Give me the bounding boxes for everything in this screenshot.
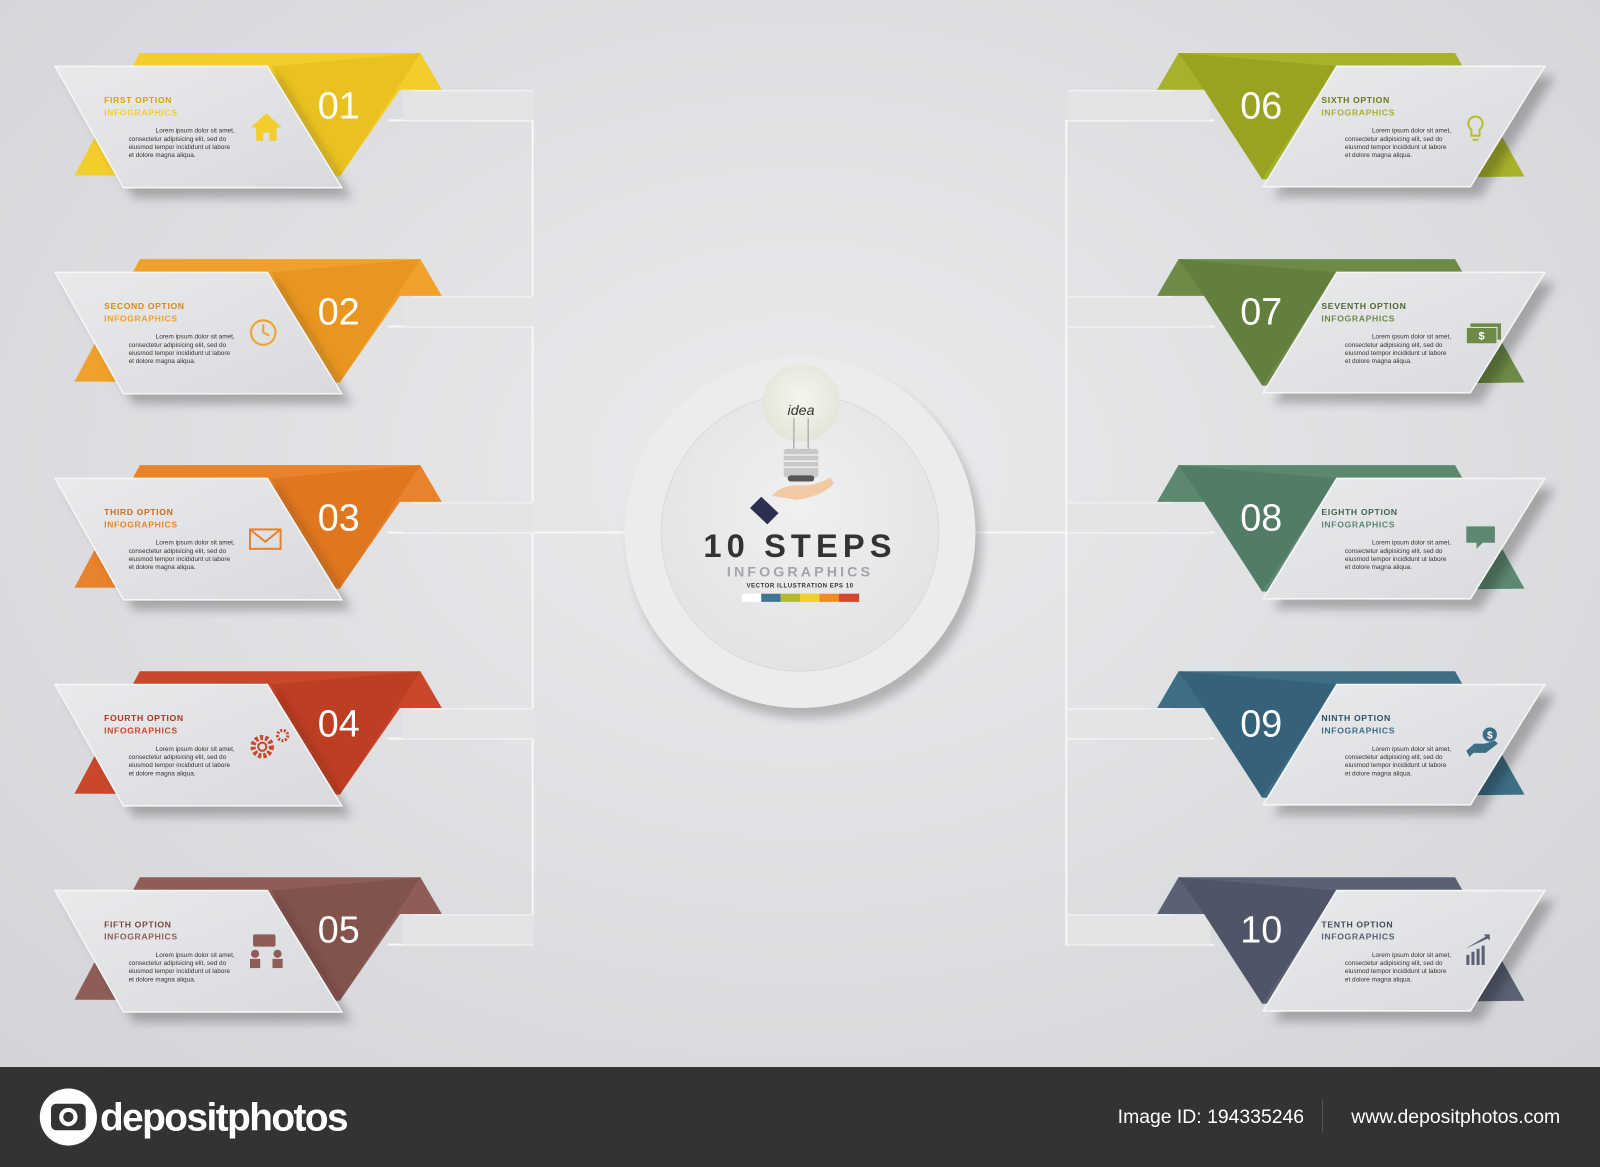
step 02 [55,259,534,404]
step 06 [1067,53,1555,197]
step 06: eiusmod tempor incididunt ut labore [1345,144,1447,151]
icon: bar chart [1465,934,1490,965]
step 05: consectetur adipisicing elit, sed do [129,960,227,967]
icon: idea bulb on hand: idea [788,403,815,419]
step 05 [55,877,534,1022]
step 08: 08 [1240,496,1282,538]
step 10 [1067,877,1555,1021]
step 01: eiusmod tempor incididunt ut labore [129,144,231,151]
footer [0,1067,1600,1167]
step 02: et dolore magna aliqua. [129,358,196,365]
step 09: INFOGRAPHICS [1321,725,1395,735]
color bar [742,594,859,602]
connector lines right [976,120,1214,945]
logo [40,1088,347,1146]
step 02: consectetur adipisicing elit, sed do [129,342,227,349]
step 07: INFOGRAPHICS [1321,313,1395,323]
footer: Image ID: 194335246 [1118,1106,1304,1128]
step 03 [55,465,534,610]
step 10: eiusmod tempor incididunt ut labore [1345,968,1447,975]
icon: bulb [1468,117,1483,140]
step 09 [1067,671,1555,815]
step 07 [1067,259,1555,403]
center circle: INFOGRAPHICS [727,564,873,580]
step 01: FIRST OPTION [104,95,172,105]
step 03: consectetur adipisicing elit, sed do [129,548,227,555]
step 09: eiusmod tempor incididunt ut labore [1345,762,1447,769]
step 04: consectetur adipisicing elit, sed do [129,754,227,761]
step 01: consectetur adipisicing elit, sed do [129,136,227,143]
step 03: Lorem ipsum dolor sit amet, [156,540,235,547]
step 05: Lorem ipsum dolor sit amet, [156,952,235,959]
step 01: et dolore magna aliqua. [129,152,196,159]
icon: clock [251,320,276,345]
step 08: INFOGRAPHICS [1321,519,1395,529]
icon: gears [253,730,288,756]
step 02: 02 [318,290,360,332]
step 09: 09 [1240,703,1282,745]
step 05: FIFTH OPTION [104,919,172,929]
step 10: TENTH OPTION [1321,919,1393,929]
step 04: et dolore magna aliqua. [129,770,196,777]
step 03: INFOGRAPHICS [104,519,178,529]
step 10: et dolore magna aliqua. [1345,976,1412,983]
step 07: consectetur adipisicing elit, sed do [1345,342,1443,349]
logo: depositphotos [100,1096,347,1139]
step 02: INFOGRAPHICS [104,313,178,323]
step 01: 01 [318,84,360,126]
step 07: 07 [1240,290,1282,332]
step 10: INFOGRAPHICS [1321,932,1395,942]
step 01 [55,53,534,198]
step 03: eiusmod tempor incididunt ut labore [129,556,231,563]
step 06: et dolore magna aliqua. [1345,152,1412,159]
footer: www.depositphotos.com [1350,1106,1560,1128]
step 04: INFOGRAPHICS [104,725,178,735]
icon: money: $ [1479,331,1486,343]
step 04: FOURTH OPTION [104,713,184,723]
step 10: consectetur adipisicing elit, sed do [1345,960,1443,967]
icon: hand with coin: $ [1487,731,1493,742]
step 06: consectetur adipisicing elit, sed do [1345,136,1443,143]
center circle: VECTOR ILLUSTRATION EPS 10 [746,583,854,590]
step 08 [1067,465,1555,609]
step 01: Lorem ipsum dolor sit amet, [156,128,235,135]
icon: hand with coin [1466,727,1498,757]
step 05: INFOGRAPHICS [104,932,178,942]
step 05: 05 [318,909,360,951]
center circle: 10 STEPS [703,527,897,564]
connector lines left [388,120,624,945]
step 02: eiusmod tempor incididunt ut labore [129,350,231,357]
step 09: et dolore magna aliqua. [1345,770,1412,777]
step 05: eiusmod tempor incididunt ut labore [129,968,231,975]
step 08: consectetur adipisicing elit, sed do [1345,548,1443,555]
step 08: EIGHTH OPTION [1321,507,1398,517]
step 01: INFOGRAPHICS [104,107,178,117]
step 10: Lorem ipsum dolor sit amet, [1372,952,1451,959]
step 07: eiusmod tempor incididunt ut labore [1345,350,1447,357]
step 07: et dolore magna aliqua. [1345,358,1412,365]
step 04: eiusmod tempor incididunt ut labore [129,762,231,769]
step 07: Lorem ipsum dolor sit amet, [1372,334,1451,341]
step 08: eiusmod tempor incididunt ut labore [1345,556,1447,563]
icon: house [251,113,282,141]
icon: people talking [250,934,283,968]
step 06: Lorem ipsum dolor sit amet, [1372,128,1451,135]
step 03: THIRD OPTION [104,507,173,517]
step 06: SIXTH OPTION [1321,95,1390,105]
icon: money [1466,323,1501,344]
step 04 [55,671,534,816]
step 04: Lorem ipsum dolor sit amet, [156,746,235,753]
step 06: 06 [1240,84,1282,126]
step 10: 10 [1240,909,1282,951]
icon: speech bubble [1466,526,1495,549]
step 05: et dolore magna aliqua. [129,976,196,983]
step 09: NINTH OPTION [1321,713,1391,723]
step 02: Lorem ipsum dolor sit amet, [156,334,235,341]
step 09: consectetur adipisicing elit, sed do [1345,754,1443,761]
step 04: 04 [318,703,360,745]
step 02: SECOND OPTION [104,301,185,311]
step 08: et dolore magna aliqua. [1345,564,1412,571]
step 08: Lorem ipsum dolor sit amet, [1372,540,1451,547]
step 03: 03 [318,496,360,538]
step 07: SEVENTH OPTION [1321,301,1406,311]
center circle [624,357,982,718]
step 06: INFOGRAPHICS [1321,107,1395,117]
step 09: Lorem ipsum dolor sit amet, [1372,746,1451,753]
icon: idea bulb on hand [750,364,840,524]
icon: envelope [250,529,281,549]
step 03: et dolore magna aliqua. [129,564,196,571]
